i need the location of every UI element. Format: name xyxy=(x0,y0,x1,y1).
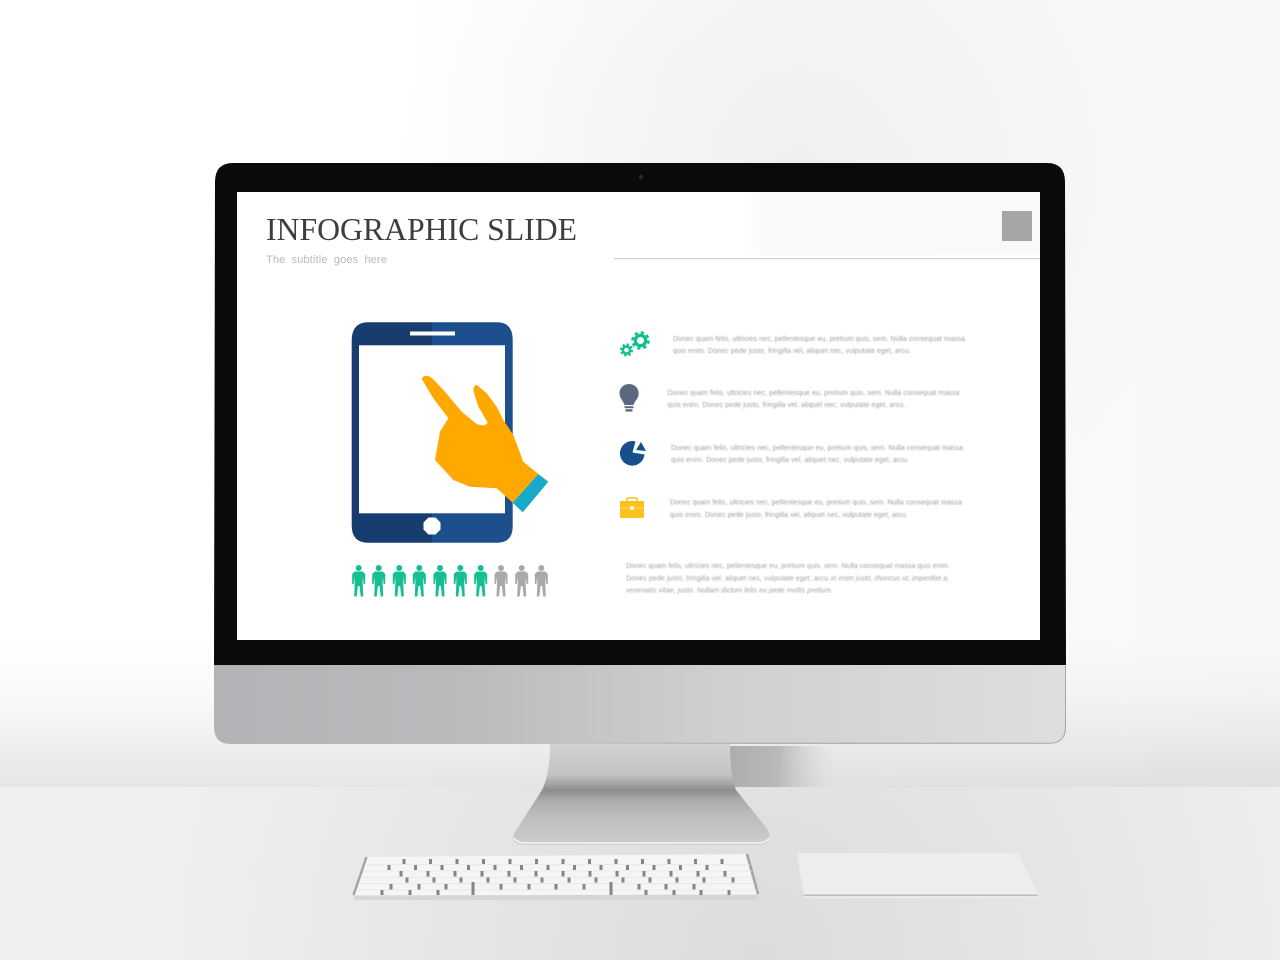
monitor chin xyxy=(214,665,1066,744)
person 7 xyxy=(474,565,487,596)
closing paragraph: Donec quam felis, ultricies nec, pellentesque eu, pretium quis, sem. Nulla consequat massa quis enim. xyxy=(626,563,950,570)
text block 4: quis enim. Donec pede justo, fringilla vel, aliquet nec, vulputate eget, arcu. xyxy=(670,512,908,519)
key row lines xyxy=(357,864,757,890)
person 9 xyxy=(515,565,528,596)
trackpad xyxy=(797,853,1038,898)
text block 1 xyxy=(673,336,965,355)
person 2 xyxy=(372,565,385,596)
slide header shading xyxy=(748,192,1040,255)
slide screen xyxy=(237,192,1040,640)
header rule xyxy=(614,258,1040,259)
text block 3 xyxy=(671,445,963,464)
tablet screen xyxy=(359,345,505,513)
keyboard bottom rim xyxy=(354,894,758,900)
illustration: tablet with hand xyxy=(352,322,548,543)
tablet body right half xyxy=(432,322,513,543)
closing paragraph: venenatis vitae, justo. Nullam dictum felis eu pede mollis pretium. xyxy=(626,588,833,594)
monitor stand xyxy=(513,744,770,845)
tablet body left half xyxy=(352,322,432,543)
person 8 xyxy=(494,565,508,596)
person 3 xyxy=(393,565,406,596)
person 10 xyxy=(535,565,548,596)
stand foot rim xyxy=(514,838,769,843)
keyboard left edge xyxy=(354,857,366,895)
closing paragraph: Donec pede justo, fringilla vel, aliquet nec, vulputate eget, arcu, xyxy=(626,576,830,582)
key gaps xyxy=(382,859,733,895)
person 4 xyxy=(413,565,426,596)
subtitle: The subtitle goes here xyxy=(266,254,387,266)
icon: briefcase xyxy=(620,498,644,518)
title: INFOGRAPHIC SLIDE xyxy=(266,211,577,247)
text block 3: quis enim. Donec pede justo, fringilla vel, aliquet nec, vulputate eget, arcu. xyxy=(671,457,909,464)
keyboard body xyxy=(353,854,758,900)
tablet home button xyxy=(424,518,440,534)
person 1 xyxy=(352,565,365,596)
person 6 xyxy=(454,565,467,596)
closing paragraph: in enim justo, rhoncus ut, imperdiet a, xyxy=(831,576,949,582)
text block 2: quis enim. Donec pede justo, fringilla vel, aliquet nec, vulputate eget, arcu. xyxy=(668,402,906,409)
chin rim xyxy=(560,666,1066,743)
closing paragraph xyxy=(626,563,950,594)
header gray square xyxy=(1002,211,1032,241)
icon: gears xyxy=(621,332,648,356)
icon: pie chart xyxy=(620,441,646,466)
keyboard xyxy=(353,854,758,900)
hand xyxy=(422,376,538,503)
hand cuff xyxy=(513,474,548,512)
text block 3: Donec quam felis, ultricies nec, pellentesque eu, pretium quis, sem. Nulla consequat massa xyxy=(671,445,963,452)
people pictogram row: 7 of 10 highlighted xyxy=(352,565,548,596)
text block 2: Donec quam felis, ultricies nec, pellentesque eu, pretium quis, sem. Nulla consequat massa xyxy=(668,390,960,397)
webcam xyxy=(639,175,643,179)
text block 4 xyxy=(670,500,962,519)
text block 1: quis enim. Donec pede justo, fringilla vel, aliquet nec, vulputate eget, arcu. xyxy=(673,348,911,355)
person 5 xyxy=(434,565,446,596)
monitor xyxy=(214,163,1066,845)
tablet speaker xyxy=(410,332,455,336)
keyboard right edge xyxy=(747,854,758,894)
icon: light bulb xyxy=(620,384,639,412)
text block 1: Donec quam felis, ultricies nec, pellentesque eu, pretium quis, sem. Nulla consequat massa xyxy=(673,336,965,343)
text block 2 xyxy=(668,390,960,409)
text block 4: Donec quam felis, ultricies nec, pellentesque eu, pretium quis, sem. Nulla consequat massa xyxy=(670,500,962,506)
monitor bezel xyxy=(214,163,1066,666)
